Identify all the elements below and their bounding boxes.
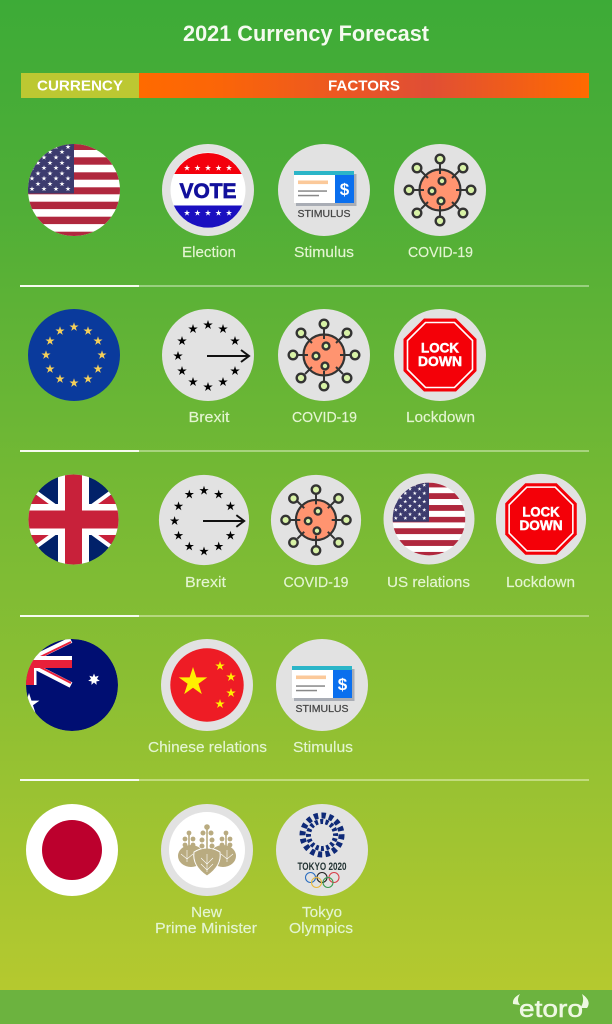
factor: Tokyo Olympics xyxy=(276,804,368,937)
header: factors xyxy=(139,73,589,98)
factor: stimulus xyxy=(276,639,368,756)
icon: stimulus cheque: $ xyxy=(340,180,350,199)
label: COVID-19: COVID-19 xyxy=(292,409,357,426)
icon: stimulus cheque: $ xyxy=(338,675,348,694)
icon: stimulus cheque: STIMULUS xyxy=(298,208,350,220)
panel: euro row xyxy=(28,309,486,426)
flag: United States xyxy=(28,144,120,237)
flag: Japan xyxy=(26,804,118,896)
flag: European Union xyxy=(28,309,120,401)
title: 2021 Currency Forecast xyxy=(183,21,430,46)
label: US relations: US relations xyxy=(387,574,470,591)
icon: vote badge: VOTE xyxy=(180,180,236,203)
divider lines xyxy=(20,285,589,781)
factor: Chinese relations xyxy=(148,639,267,756)
factor: lockdown xyxy=(394,309,486,426)
icon: lockdown stop sign: DOWN xyxy=(418,353,462,369)
factor: COVID-19 xyxy=(271,475,361,591)
label: Lockdown: Lockdown xyxy=(506,574,575,591)
icon: lockdown stop sign: DOWN xyxy=(519,518,563,533)
icon: China flag on grey xyxy=(161,639,253,731)
label: COVID-19: COVID-19 xyxy=(408,244,473,261)
icon: lockdown stop sign: LOCK xyxy=(522,505,560,520)
header: currency xyxy=(21,73,139,98)
factor: lockdown xyxy=(496,474,586,591)
label: Election: Election xyxy=(182,244,236,261)
factor: Brexit xyxy=(159,475,249,591)
label: Stimulus: Stimulus xyxy=(293,739,353,756)
icon: lockdown stop sign: LOCK xyxy=(421,340,459,356)
label: Tokyo Olympics xyxy=(289,904,353,937)
panel: US dollar row xyxy=(28,144,486,261)
panel: pound row xyxy=(28,474,586,591)
panel: yen row xyxy=(26,804,368,937)
icon: Brexit stars and arrow xyxy=(162,309,254,401)
icon: lockdown stop sign xyxy=(496,474,586,564)
factor: stimulus xyxy=(278,144,370,261)
icon: paulownia seal xyxy=(161,804,253,896)
icon: Tokyo 2020 emblem: TOKYO 2020 xyxy=(298,861,346,873)
label: New Prime Minister xyxy=(155,904,257,937)
icon: stimulus cheque xyxy=(276,639,368,731)
label: Tokyo Olympics: Tokyo xyxy=(302,904,342,921)
icon: US flag on grey xyxy=(384,474,474,564)
panel: Australian dollar row xyxy=(19,639,368,756)
icon: virus xyxy=(278,309,370,401)
factor: Brexit xyxy=(162,309,254,426)
factor: US relations xyxy=(384,474,474,591)
icon: Brexit stars and arrow xyxy=(159,475,249,565)
flag: United Kingdom xyxy=(28,474,120,566)
logo: eToro xyxy=(513,994,589,1023)
flag: Australia xyxy=(19,639,118,731)
factor: COVID-19 xyxy=(394,144,486,261)
icon: stimulus cheque xyxy=(278,144,370,236)
label: Lockdown: Lockdown xyxy=(406,409,475,426)
icon: virus xyxy=(394,144,486,236)
factor: election xyxy=(162,144,254,261)
factor: new prime minister xyxy=(155,804,257,937)
icon: lockdown stop sign xyxy=(394,309,486,401)
label: Chinese relations: Chinese relations xyxy=(148,739,267,756)
label: Brexit: Brexit xyxy=(188,409,230,426)
footer band xyxy=(0,990,612,1024)
header bar xyxy=(21,73,589,98)
label: Brexit: Brexit xyxy=(185,574,227,591)
header: currency: CURRENCY xyxy=(37,78,123,94)
label: New Prime Minister: New xyxy=(191,904,222,921)
logo: eToro: etoro xyxy=(519,996,583,1023)
label: COVID-19: COVID-19 xyxy=(284,574,348,591)
icon: stimulus cheque: STIMULUS xyxy=(296,703,348,715)
label: Tokyo Olympics: Olympics xyxy=(289,920,353,937)
factor: COVID-19 xyxy=(278,309,370,426)
icon: virus xyxy=(271,475,361,565)
header: factors: FACTORS xyxy=(328,78,400,94)
label: Stimulus: Stimulus xyxy=(294,244,354,261)
label: New Prime Minister: Prime Minister xyxy=(155,920,257,937)
